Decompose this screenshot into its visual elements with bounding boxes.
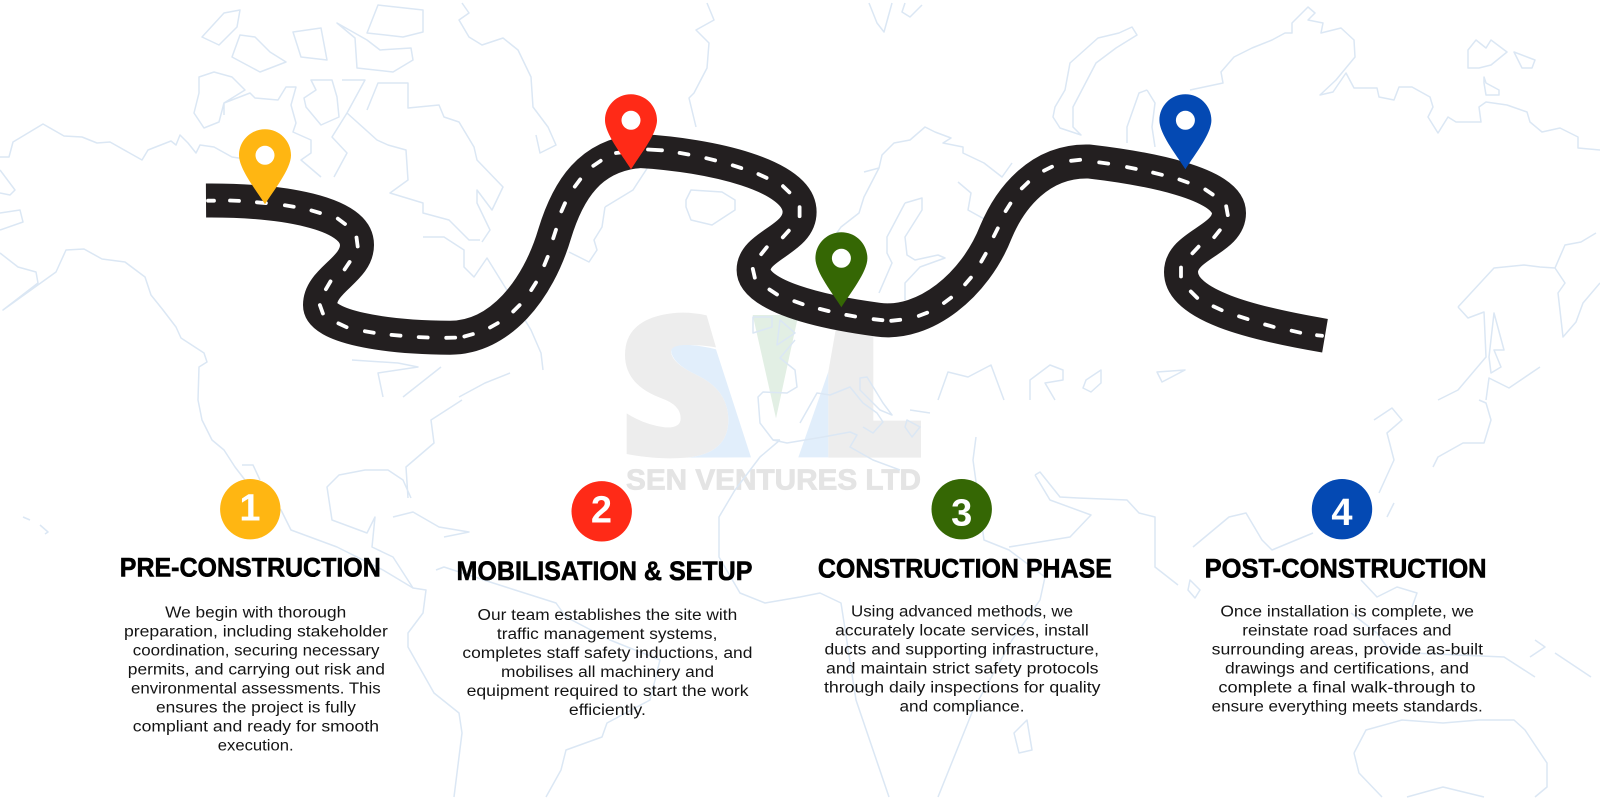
number badge 2: 2 [591,490,612,532]
body text: mobilisation and setup: mobilises all machinery and [501,664,714,681]
number badge 4: 4 [1331,492,1353,534]
body text: construction phase: and compliance. [900,699,1024,716]
body text: post-construction: complete a final walk-through to [1218,680,1476,697]
heading: construction phase: CONSTRUCTION PHASE [818,553,1112,583]
body text: construction phase: accurately locate services, install [835,623,1089,640]
body text: pre-construction: environmental assessments. This [131,680,381,697]
body text: construction phase: Using advanced methods, we [851,604,1073,621]
body text: mobilisation and setup: equipment required to start the work [467,683,749,700]
icon: blue map pin [1159,94,1211,169]
watermark logo: SVL Sen Ventures Ltd: SEN VENTURES LTD [626,464,921,496]
body text: post-construction: Once installation is complete, we [1220,604,1474,621]
icon: green map pin [815,232,867,307]
heading: pre-construction: PRE-CONSTRUCTION [120,552,381,582]
body text: pre-construction: compliant and ready for smooth [133,718,379,735]
body text: pre-construction [124,604,388,754]
body text: mobilisation and setup [462,607,752,719]
number badge 3 [932,479,992,539]
panel: step 3 construction phase [818,479,1112,716]
number badge 3: 3 [951,492,972,534]
body text: pre-construction: permits, and carrying out risk and [128,661,385,678]
heading: mobilisation and setup: MOBILISATION & SETUP [456,556,752,586]
panel: step 1 pre-construction [120,479,388,754]
body text: post-construction: ensure everything meets standards. [1212,699,1483,716]
body text: pre-construction: coordination, securing necessary [133,642,380,659]
number badge 2 [572,481,632,542]
body text: pre-construction: preparation, including stakeholder [124,623,388,640]
body text: mobilisation and setup: Our team establishes the site with [478,607,737,624]
icon: red map pin [605,94,657,169]
body text: post-construction: drawings and certifications, and [1225,661,1469,678]
body text: post-construction [1212,604,1484,716]
body text: post-construction: reinstate road surfaces and [1242,623,1452,640]
panel: step 4 post-construction [1205,479,1487,716]
panel: step 2 mobilisation and setup [456,481,752,719]
body text: pre-construction: We begin with thorough [165,604,346,621]
body text: pre-construction: execution. [218,737,294,754]
body text: post-construction: surrounding areas, provide as-built [1212,642,1484,659]
body text: construction phase: ducts and supporting infrastructure, [824,642,1099,659]
icon: yellow map pin [239,129,291,204]
body text: construction phase: through daily inspections for quality [824,680,1101,697]
body text: pre-construction: ensures the project is fully [156,699,356,716]
heading: post-construction: POST-CONSTRUCTION [1205,553,1487,583]
body text: construction phase: and maintain strict safety protocols [826,661,1099,678]
body text: construction phase [824,604,1101,716]
watermark logo: SVL Sen Ventures Ltd [625,313,921,496]
body text: mobilisation and setup: completes staff safety inductions, and [462,645,752,662]
body text: mobilisation and setup: traffic management systems, [497,626,717,643]
number badge 1: 1 [239,488,261,530]
winding road [206,150,1325,338]
number badge 4 [1312,479,1372,539]
number badge 1 [220,479,280,539]
body text: mobilisation and setup: efficiently. [569,702,646,719]
